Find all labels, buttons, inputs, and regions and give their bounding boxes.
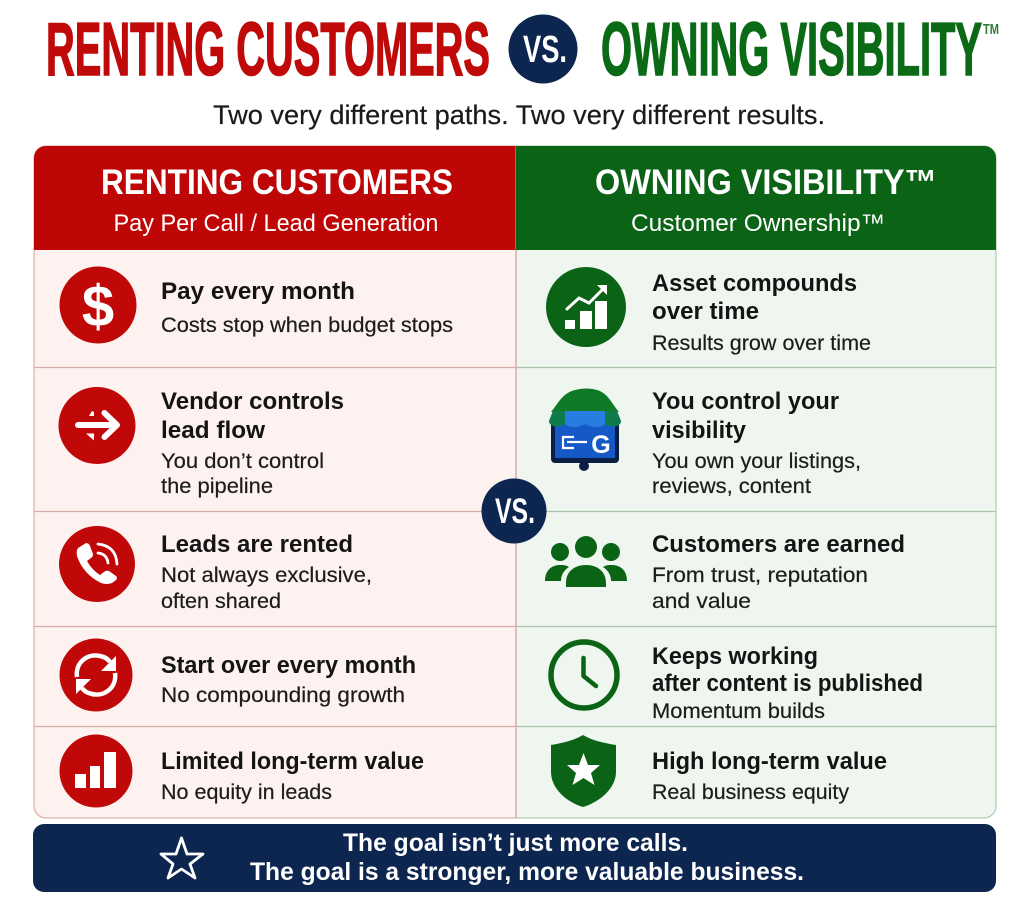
footer text: The goal isn’t just more calls. <box>343 829 688 857</box>
row: start over <box>60 638 416 712</box>
row: pay every month: Pay every month <box>161 278 355 305</box>
title: VS. <box>523 29 567 71</box>
row: high value <box>551 735 887 807</box>
row: leads are rented: often shared <box>161 590 281 613</box>
row: customers earned: and value <box>652 590 751 613</box>
owning header: Customer Ownership™ <box>631 210 885 237</box>
icon: dollar: $ <box>82 274 114 339</box>
renting header <box>34 146 516 250</box>
row: vendor controls: You don’t control <box>161 450 324 473</box>
icon: shield <box>551 735 616 807</box>
icon: star <box>161 838 203 878</box>
row: high value: Real business equity <box>652 781 850 804</box>
footer text <box>250 829 804 886</box>
subtitle: Two very different paths. Two very different results. <box>213 100 825 130</box>
row: you control: reviews, content <box>652 475 811 498</box>
row: start over: No compounding growth <box>161 684 405 707</box>
row: keeps working <box>551 642 923 723</box>
row: start over: Start over every month <box>161 652 416 679</box>
row: keeps working: Keeps working <box>652 643 818 670</box>
title: TM <box>983 22 999 38</box>
icon: storefront <box>549 388 621 471</box>
row: limited value: Limited long-term value <box>161 748 424 775</box>
row: customers earned: Customers are earned <box>652 531 905 558</box>
row: limited value <box>60 734 424 808</box>
row: leads are rented <box>59 526 372 613</box>
title: RENTING CUSTOMERS <box>46 7 490 91</box>
row: pay every month <box>60 266 453 344</box>
row: leads are rented: Leads are rented <box>161 531 353 558</box>
row: vendor controls <box>58 387 344 498</box>
owning header: OWNING VISIBILITY™ <box>595 163 937 202</box>
row: high value: High long-term value <box>652 748 887 775</box>
row: asset compounds: Asset compounds <box>652 270 857 297</box>
row: asset compounds <box>546 267 871 355</box>
renting header: Pay Per Call / Lead Generation <box>114 210 438 237</box>
row: pay every month: Costs stop when budget stops <box>161 314 453 337</box>
row: you control <box>549 388 861 498</box>
panel: renting customers <box>34 146 516 818</box>
renting header: RENTING CUSTOMERS <box>101 163 453 202</box>
row: customers earned <box>545 531 905 613</box>
icon: storefront: G <box>591 431 611 459</box>
center vs badge: VS. <box>495 492 535 531</box>
row: vendor controls: lead flow <box>161 417 266 444</box>
icon: growth chart <box>546 267 626 347</box>
row: customers earned: From trust, reputation <box>652 564 868 587</box>
center vs badge <box>482 478 546 544</box>
icon: arrow <box>58 387 136 464</box>
footer text: The goal is a stronger, more valuable business. <box>250 858 804 886</box>
icon: clock <box>551 642 617 708</box>
icon: dollar <box>60 266 136 344</box>
icon: people <box>545 536 627 587</box>
row: keeps working: Momentum builds <box>652 700 825 723</box>
footer banner <box>33 824 996 892</box>
icon: bar chart <box>60 734 132 808</box>
row: limited value: No equity in leads <box>161 781 332 804</box>
icon: phone <box>59 526 135 602</box>
row: you control: You own your listings, <box>652 450 861 473</box>
row: leads are rented: Not always exclusive, <box>161 564 372 587</box>
panel: owning visibility <box>516 146 996 818</box>
owning header <box>516 146 996 250</box>
row: vendor controls: Vendor controls <box>161 388 344 415</box>
icon: refresh <box>60 638 132 712</box>
row: asset compounds: over time <box>652 298 759 325</box>
row: asset compounds: Results grow over time <box>652 332 871 355</box>
row: keeps working: after content is published <box>652 670 923 697</box>
row: vendor controls: the pipeline <box>161 475 273 498</box>
row: you control: You control your <box>652 388 839 415</box>
row: you control: visibility <box>652 417 746 444</box>
